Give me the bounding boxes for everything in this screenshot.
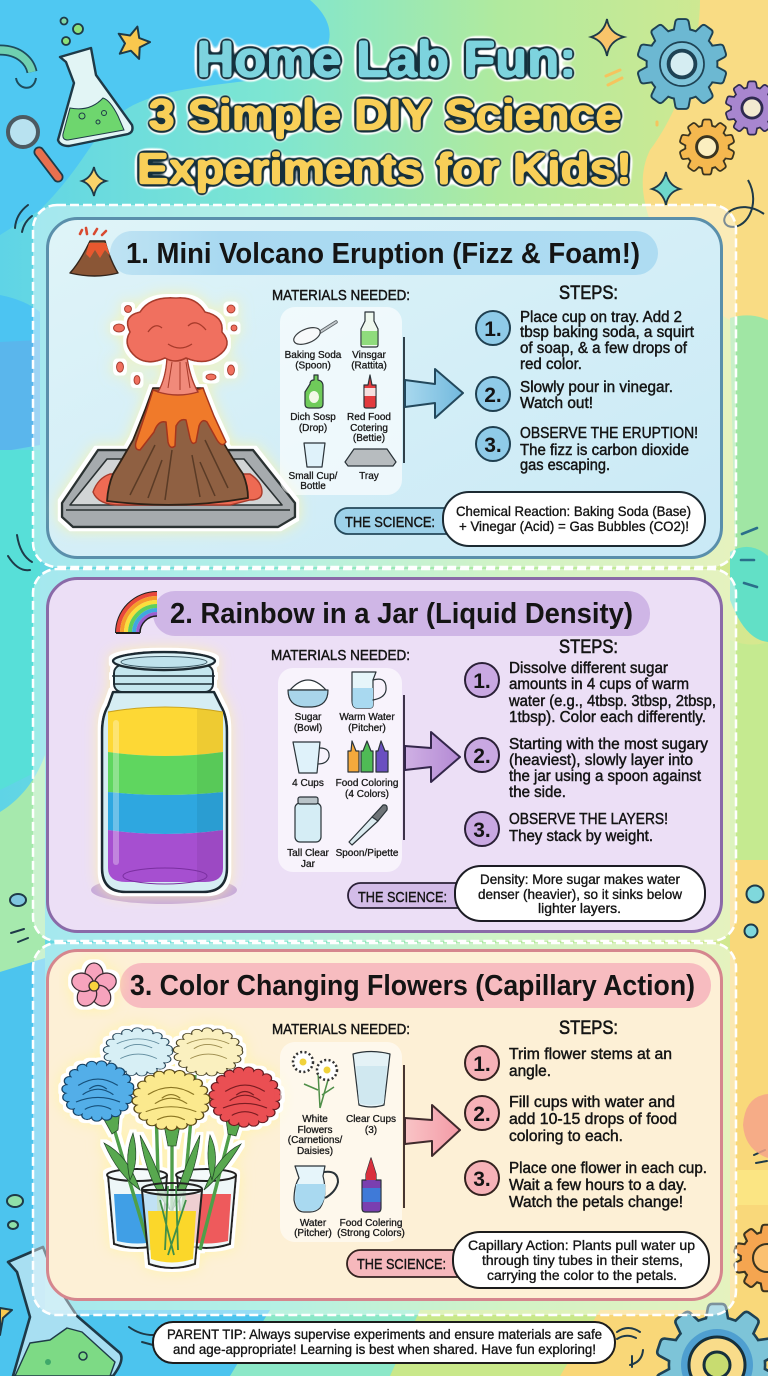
leaves [102,1108,242,1210]
heading pill: volcano [110,231,658,275]
label: water: Water [300,1218,326,1229]
decorative marks [8,205,767,1163]
icon: yellow star [119,27,150,59]
decorative tip marks [129,1327,643,1367]
icon: daisies [293,1052,337,1108]
step 3: 3. [484,434,502,457]
step 2: Slowly pour in vinegar. [520,379,673,396]
parent tip callout [153,1322,615,1363]
icon: bubbles [60,18,83,45]
step 2: Watch out! [520,395,593,412]
label: clear cups: Clear Cups [346,1114,396,1125]
steps heading: STEPS: [559,1018,618,1039]
label: cups: 4 Cups [292,778,324,789]
icon: orange gear [680,120,734,174]
icon: purple gear [726,82,768,134]
icon: soap bottle [305,375,323,408]
step 1: angle. [509,1063,551,1080]
materials card [280,1042,405,1242]
step 1: 1tbsp). Color each differently. [509,709,706,726]
science callout: Density: More sugar makes water [480,871,680,887]
icon: red bottle [364,375,376,408]
materials label: MATERIALS NEEDED: [272,1022,410,1038]
step 3 [465,1160,707,1211]
science callout: THE SCIENCE: [345,515,435,531]
step 1: Trim flower stems at an [509,1046,672,1063]
decorative swirl right [724,180,764,227]
cup front [142,1183,202,1268]
panel: color changing flowers [48,950,722,1300]
decorative orange dashes [606,70,657,125]
step 1: Dissolve different sugar [509,660,668,677]
step 2: 2. [484,384,502,407]
step 3: OBSERVE THE LAYERS! [509,811,668,828]
step 1: amounts in 4 cups of warm [509,676,689,693]
step 2: coloring to each. [509,1128,623,1145]
step 1: tbsp baking soda, a squirt [520,324,695,341]
label: vinegar: Vinsgar [352,350,386,361]
label: white flowers: White [302,1114,328,1125]
title [137,30,632,194]
step 1 [476,309,695,373]
step 2: add 10-15 drops of food [509,1111,677,1128]
step 2 [465,736,708,801]
decorative swirl left [0,50,36,88]
icon: food coloring bottles [348,741,388,772]
step 2 [465,1094,677,1145]
panel: mini volcano [48,218,722,558]
icon: pipette [349,805,387,845]
heading pill: rainbow [153,591,650,636]
icon: water pitcher [294,1166,338,1212]
science callout: + Vinegar (Acid) = Gas Bubbles (CO2)! [459,518,689,534]
flower: pale blue [108,1032,168,1072]
icon: clear cup [353,1052,390,1107]
icon: flask top [58,48,132,146]
decorative panel frames [33,205,736,1315]
arrow: rainbow [404,695,460,840]
label: white flowers: (Carnetions/ [288,1135,342,1146]
step 1: Place cup on tray. Add 2 [520,309,682,326]
step 3: OBSERVE THE ERUPTION! [520,425,698,442]
steps heading: STEPS: [559,637,618,658]
title: Home Lab Fun: [196,30,576,88]
step 1: red color. [520,356,582,373]
science callout: THE SCIENCE: [358,890,447,906]
illustration: volcano on tray [62,298,295,527]
label: food coloring: Food Coloring [336,778,398,789]
step 1: 1. [484,318,502,341]
step 2 [476,377,673,412]
label: tray: Tray [359,471,379,482]
arrow: volcano [404,337,463,463]
flower: blue [67,1065,129,1117]
step 2: the side. [509,784,566,801]
step 2: 2. [473,745,491,768]
label: food coloring: (Strong Colors) [337,1228,405,1239]
icon: rainbow [116,592,157,633]
label: red food coloring: Red Food [347,412,391,423]
science callout: Capillary Action: Plants pull water up [468,1237,695,1253]
icon: star bottom left [0,1308,12,1335]
label: pipette: Spoon/Pipette [336,848,399,859]
label: warm water: Warm Water [339,712,395,723]
science callout [347,1232,709,1288]
step 3: The fizz is carbon dioxide [520,442,689,459]
label: tall jar: Tall Clear [287,848,329,859]
title: Experiments for Kids! [137,144,632,194]
icon: measuring cup [293,742,329,773]
step 3: 3. [473,819,491,842]
steps heading: STEPS: [559,283,618,304]
flower: red [214,1071,276,1123]
science callout [335,492,705,546]
step 2: Fill cups with water and [509,1094,675,1111]
heading pill: rainbow: 2. Rainbow in a Jar (Liquid Density) [170,598,633,630]
panel: rainbow in a jar [48,578,722,932]
step 3 [465,811,668,846]
icon: tall clear jar [295,797,321,842]
arrow: flowers [404,1065,460,1208]
label: small cup: Bottle [300,481,326,492]
science callout: lighter layers. [538,900,621,916]
heading pill: flowers: 3. Color Changing Flowers (Capillary Action) [130,970,695,1002]
heading pill: flowers [120,963,711,1008]
science callout: Chemical Reaction: Baking Soda (Base) [456,503,691,519]
icon: small tray [345,449,396,466]
step 1 [465,660,716,726]
label: food coloring: Food Colering [340,1218,402,1229]
step 3: Wait a few hours to a day. [509,1177,687,1194]
materials card [278,668,402,872]
label: white flowers: Flowers [297,1125,333,1136]
step 3: 3. [473,1168,491,1191]
heading pill: volcano: 1. Mini Volcano Eruption (Fizz & Foam!) [126,238,640,270]
science callout [348,866,705,921]
label: dish soap: (Drop) [299,423,327,434]
icon: sparkle teal [652,172,680,205]
label: vinegar: (Rattita) [351,360,387,372]
icon: water pitcher [352,672,386,708]
label: baking soda: Baking Soda [285,350,341,361]
icon: pink flower [69,963,119,1010]
decorative rings [7,886,764,1229]
step 1: of soap, & a few drops of [520,340,688,357]
label: tall jar: Jar [301,859,316,870]
materials card [280,307,402,495]
illustration: carnations in colored cups [67,1032,276,1268]
label: food coloring: (4 Colors) [345,789,389,800]
step 3: gas escaping. [520,457,610,474]
title: 3 Simple DIY Science [148,90,622,140]
icon: spoon [291,322,336,348]
icon: small cup [304,443,325,467]
step 3: They stack by weight. [509,828,653,845]
cups back [107,1169,236,1248]
icon: food coloring bottle [362,1158,381,1212]
decorative orange shape right [743,1094,768,1158]
step 2: 2. [473,1103,491,1126]
label: sugar: Sugar [295,712,321,723]
parent tip callout: PARENT TIP: Always supervise experiments and ensure materials are safe [167,1326,602,1342]
label: warm water: (Pitcher) [348,723,386,734]
step 1 [465,1046,672,1080]
icon: flask bottom left [8,1247,121,1376]
step 1: water (e.g., 4tbsp. 3tbsp, 2tbsp, [508,693,716,710]
science callout: THE SCIENCE: [357,1257,446,1273]
icon: blue gear bottom right [657,1305,768,1376]
label: water: (Pitcher) [294,1228,332,1239]
icon: orange gear right edge [735,1226,768,1290]
science callout: through tiny tubes in their stems, [482,1252,683,1268]
science callout: denser (heavier), so it sinks below [478,886,683,902]
step 3: Watch the petals change! [509,1194,683,1211]
label: sugar: (Bowl) [294,723,322,734]
label: white flowers: Daisies) [297,1146,333,1157]
icon: sparkle yellow [82,167,106,196]
science callout: carrying the color to the petals. [487,1267,677,1283]
label: baking soda: (Spoon) [295,360,331,372]
materials label: MATERIALS NEEDED: [271,648,410,664]
label: dish soap: Dich Sosp [290,412,336,423]
materials label: MATERIALS NEEDED: [272,288,410,304]
illustration: layered jar [91,652,237,904]
icon: vinegar bottle [361,312,378,347]
step 3: Place one flower in each cup. [509,1160,707,1177]
icon: small volcano [70,228,118,276]
step 2: (heaviest), slowly layer into [509,752,693,769]
icon: sparkle orange [591,19,624,56]
label: small cup: Small Cup/ [289,471,337,482]
step 2: the jar using a spoon against [509,768,702,785]
icon: magnifying glass [8,117,58,177]
step 2: Starting with the most sugary [509,736,708,753]
flower: yellow [138,1074,204,1126]
icon: sugar bowl [288,680,328,707]
flower: cream [178,1032,238,1072]
label: red food coloring: Cotering [350,423,388,434]
icon: big blue gear [638,20,726,108]
stems [110,1075,232,1250]
label: clear cups: (3) [365,1125,377,1136]
parent tip callout: and age-appropriate! Learning is best when shared. Have fun exploring! [173,1341,596,1357]
step 1: 1. [473,670,491,693]
step 1: 1. [473,1053,491,1076]
step 3 [476,425,698,474]
label: red food coloring: (Bettie) [353,433,385,444]
